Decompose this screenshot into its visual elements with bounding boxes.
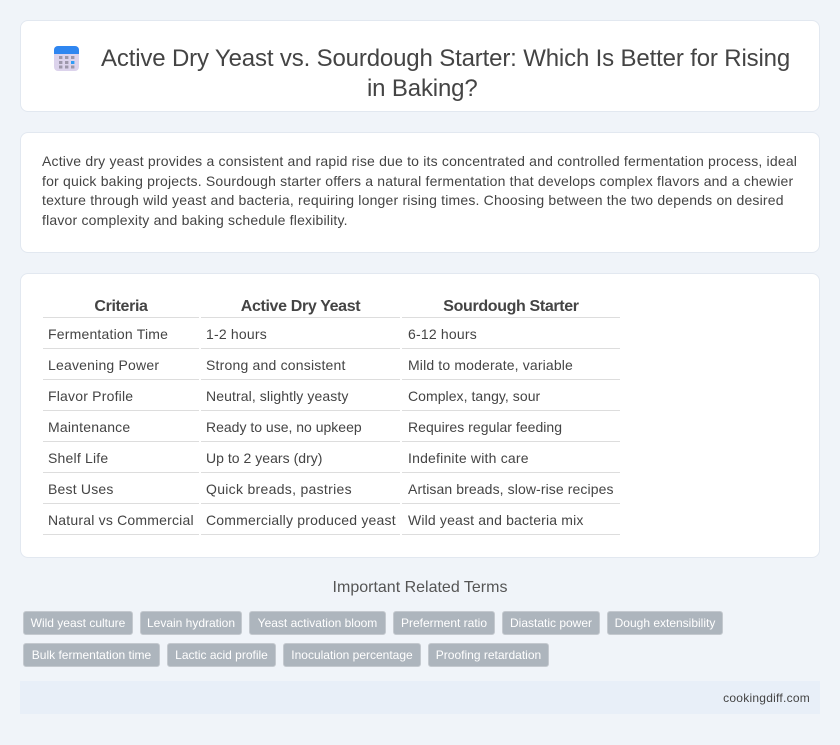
text block: summary paragraph: for quick baking projects. Sourdough starter offers a natural fermentation that develops complex flavors and a chewier bbox=[42, 173, 793, 189]
comparison table: Artisan breads, slow-rise recipes bbox=[408, 481, 614, 497]
comparison table: Requires regular feeding bbox=[408, 419, 562, 435]
comparison table: Wild yeast and bacteria mix bbox=[408, 512, 584, 528]
footer bar bbox=[20, 681, 820, 714]
panel: title card bbox=[20, 20, 820, 112]
tag list: related terms: Yeast activation bloom bbox=[258, 616, 377, 630]
comparison table: Maintenance bbox=[48, 419, 130, 435]
comparison table: Quick breads, pastries bbox=[206, 481, 352, 497]
text block: summary paragraph bbox=[42, 153, 797, 228]
comparison table: 6-12 hours bbox=[408, 326, 477, 342]
comparison table: Strong and consistent bbox=[206, 357, 346, 373]
text block: summary paragraph: Active dry yeast provides a consistent and rapid rise due to its concentrated and controlled fermentation process, ideal bbox=[42, 153, 797, 169]
comparison table: Sourdough Starter bbox=[443, 298, 579, 315]
comparison table: Mild to moderate, variable bbox=[408, 357, 573, 373]
tag list: related terms: Inoculation percentage bbox=[291, 648, 413, 662]
comparison table: Active Dry Yeast bbox=[241, 298, 360, 315]
comparison table: Flavor Profile bbox=[48, 388, 133, 404]
comparison table: Leavening Power bbox=[48, 357, 159, 373]
comparison table: Complex, tangy, sour bbox=[408, 388, 540, 404]
comparison table: Up to 2 years (dry) bbox=[206, 450, 322, 466]
comparison table: Criteria bbox=[94, 298, 148, 315]
tag list: related terms: Lactic acid profile bbox=[175, 648, 268, 662]
tag list: related terms: Diastatic power bbox=[510, 616, 592, 630]
heading: related terms: Important Related Terms bbox=[333, 579, 507, 596]
comparison table: Shelf Life bbox=[48, 450, 108, 466]
title bbox=[101, 45, 790, 102]
text block: summary paragraph: texture through wild yeast and bacteria, requiring longer rising times. Choosing between the two depends on desired bbox=[42, 192, 784, 208]
comparison table: Indefinite with care bbox=[408, 450, 529, 466]
title: Active Dry Yeast vs. Sourdough Starter: Which Is Better for Rising bbox=[101, 45, 790, 72]
tag list: related terms: Preferment ratio bbox=[401, 616, 487, 630]
title: in Baking? bbox=[367, 75, 478, 102]
comparison table: Neutral, slightly yeasty bbox=[206, 388, 348, 404]
text block: summary paragraph: flavor complexity and baking schedule flexibility. bbox=[42, 212, 348, 228]
tag list: related terms: Bulk fermentation time bbox=[32, 648, 151, 662]
tag list: related terms: Proofing retardation bbox=[436, 648, 541, 662]
comparison table: Natural vs Commercial bbox=[48, 512, 194, 528]
tag list: related terms: Wild yeast culture bbox=[31, 616, 125, 630]
tag list: related terms: Dough extensibility bbox=[615, 616, 715, 630]
comparison table: Ready to use, no upkeep bbox=[206, 419, 362, 435]
icon: calendar bbox=[54, 46, 79, 71]
tag list: related terms bbox=[23, 611, 723, 667]
comparison table: Commercially produced yeast bbox=[206, 512, 396, 528]
footer text: source: cookingdiff.com bbox=[723, 691, 810, 705]
tag list: related terms: Levain hydration bbox=[147, 616, 235, 630]
panel: summary bbox=[20, 132, 820, 253]
panel: comparison table card bbox=[20, 273, 820, 558]
comparison table: 1-2 hours bbox=[206, 326, 267, 342]
comparison table bbox=[43, 298, 620, 535]
comparison table: Best Uses bbox=[48, 481, 114, 497]
comparison table: Fermentation Time bbox=[48, 326, 168, 342]
